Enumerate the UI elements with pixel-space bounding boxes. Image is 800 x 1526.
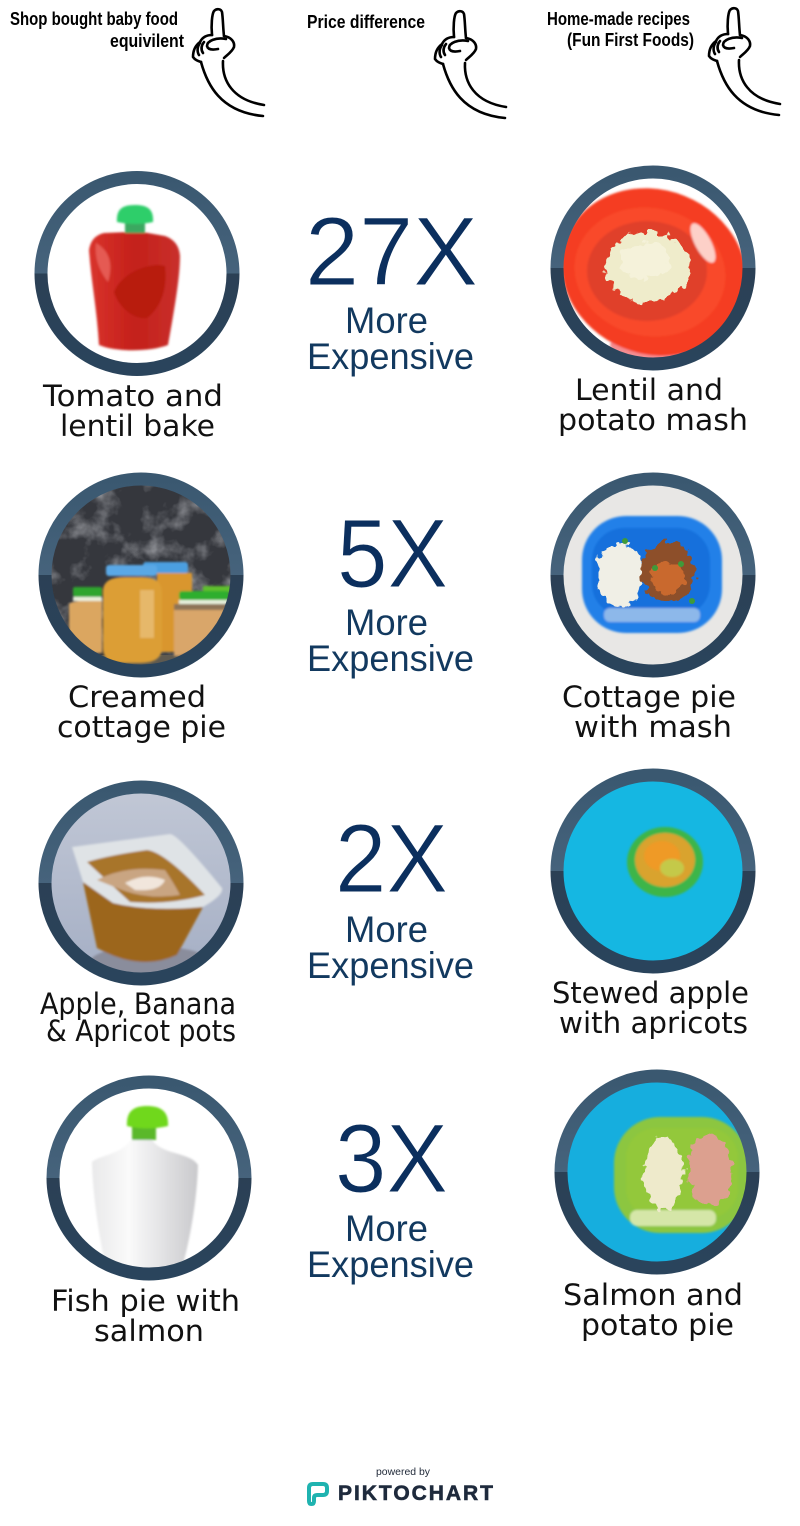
icon: pointing hand 2	[435, 11, 506, 118]
price: 2X more expensive: 2X	[335, 804, 448, 913]
label: fish pie with salmon: Fish pie with	[51, 1284, 240, 1318]
price: 27X more expensive: Expensive	[307, 336, 474, 377]
icon: pointing hand 1	[193, 9, 264, 116]
price: 3X more expensive: More	[345, 1208, 428, 1249]
label: tomato and lentil bake: lentil bake	[60, 409, 215, 443]
label: cottage pie with mash: Cottage pie	[562, 680, 736, 714]
icon: pointing hand 3	[709, 8, 780, 115]
label: stewed apple with apricots: with apricots	[559, 1006, 748, 1040]
label: apple banana and apricot pots: Apple, Banana	[40, 987, 236, 1021]
label: tomato and lentil bake: Tomato and	[42, 379, 223, 413]
price: 2X more expensive	[307, 804, 474, 986]
label: creamed cottage pie: Creamed	[68, 680, 206, 714]
ring	[557, 479, 749, 671]
label: creamed cottage pie	[57, 680, 226, 744]
price: 27X more expensive: More	[345, 300, 428, 341]
label: lentil and potato mash: potato mash	[558, 403, 748, 437]
label: salmon and potato pie: Salmon and	[563, 1278, 743, 1312]
heading: shop bought baby food equivalent	[10, 9, 184, 51]
label: lentil and potato mash: Lentil and	[575, 373, 723, 407]
label: apple banana and apricot pots: & Apricot pots	[46, 1014, 236, 1048]
heading: shop bought baby food equivalent: Shop bought baby food	[10, 9, 178, 29]
label: apple banana and apricot pots	[40, 987, 236, 1048]
photo: red tomato and lentil pouch	[40, 175, 240, 375]
price: 5X more expensive: Expensive	[307, 638, 474, 679]
label: cottage pie with mash	[562, 680, 736, 744]
photo: stewed apple in green bowl	[555, 775, 755, 970]
heading: shop bought baby food equivalent: equivilent	[110, 31, 184, 51]
price: 5X more expensive: 5X	[337, 499, 448, 608]
label: stewed apple with apricots	[552, 976, 749, 1040]
ring	[45, 787, 237, 979]
label: stewed apple with apricots: Stewed apple	[552, 976, 749, 1010]
photo: cottage pie with mash on blue plate	[555, 479, 755, 671]
price: 2X more expensive: More	[345, 909, 428, 950]
heading: home-made recipes: (Fun First Foods)	[567, 30, 694, 50]
label: tomato and lentil bake	[42, 379, 223, 443]
footer: powered by piktochart: PIKTOCHART	[338, 1482, 493, 1505]
heading: home-made recipes	[547, 9, 694, 50]
photo: lentil and potato mash on red plate	[550, 166, 756, 370]
photo: apple banana apricot pot	[45, 785, 240, 980]
price: 5X more expensive: More	[345, 602, 428, 643]
heading: home-made recipes: Home-made recipes	[547, 9, 690, 29]
ring	[45, 479, 237, 671]
footer: powered by piktochart: powered by	[376, 1466, 431, 1478]
icon: piktochart logo	[309, 1484, 327, 1504]
price: 5X more expensive	[307, 499, 474, 679]
ring	[53, 1082, 245, 1274]
label: creamed cottage pie: cottage pie	[57, 710, 226, 744]
label: salmon and potato pie	[563, 1278, 743, 1342]
price: 27X more expensive: 27X	[305, 197, 478, 306]
label: fish pie with salmon	[51, 1284, 240, 1348]
label: fish pie with salmon: salmon	[94, 1314, 204, 1348]
price: 2X more expensive: Expensive	[307, 945, 474, 986]
price: 3X more expensive: Expensive	[307, 1244, 474, 1285]
label: cottage pie with mash: with mash	[574, 710, 732, 744]
ring	[561, 1076, 753, 1268]
heading: price difference: Price difference	[307, 12, 425, 32]
label: lentil and potato mash	[558, 373, 748, 437]
photo: creamed cottage pie jars	[45, 479, 240, 675]
price: 3X more expensive: 3X	[335, 1104, 448, 1213]
ring	[41, 178, 233, 370]
ring	[557, 775, 749, 967]
photo: salmon and potato pie on green plate	[560, 1075, 755, 1270]
label: salmon and potato pie: potato pie	[581, 1308, 734, 1342]
price: 3X more expensive	[307, 1104, 474, 1285]
price: 27X more expensive	[305, 197, 478, 377]
photo: white fish pie pouch	[50, 1080, 250, 1275]
footer: powered by piktochart	[309, 1466, 493, 1505]
ring	[557, 172, 749, 364]
